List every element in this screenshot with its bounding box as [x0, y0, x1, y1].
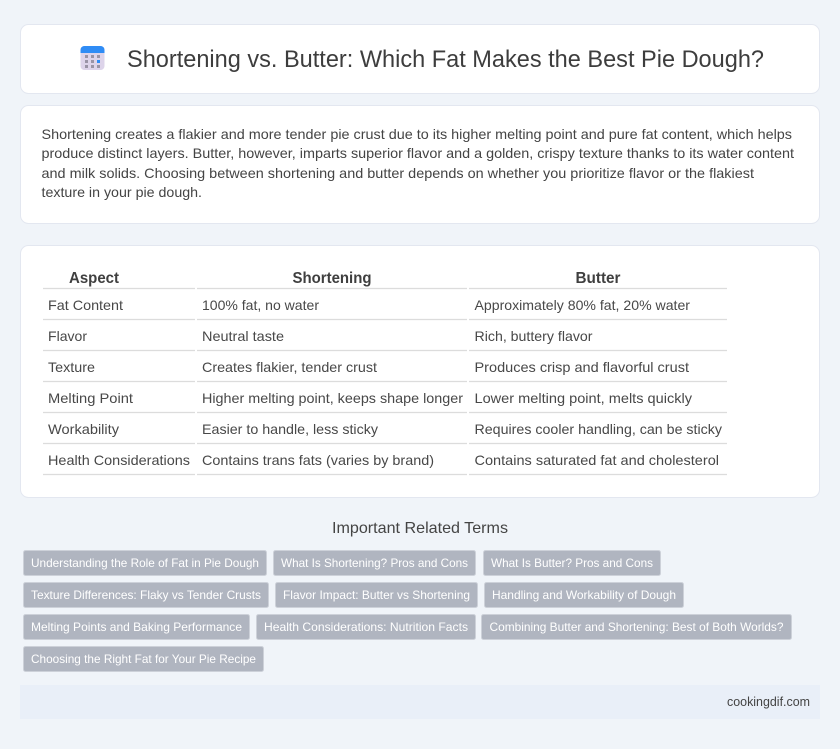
related term tags: Flavor Impact: Butter vs Shortening	[283, 588, 470, 602]
related term tags: What Is Shortening? Pros and Cons	[281, 556, 468, 570]
row: melting point: Higher melting point, keeps shape longer	[202, 390, 463, 406]
row: flavor: Flavor	[48, 328, 87, 344]
related term tags: Texture Differences: Flaky vs Tender Crusts	[31, 588, 261, 602]
row: flavor	[48, 328, 593, 344]
row: workability: Requires cooler handling, can be sticky	[474, 421, 722, 437]
row: fat content: Approximately 80% fat, 20% water	[474, 297, 690, 313]
footer: cookingdif.com	[727, 695, 810, 709]
icon: calendar	[80, 46, 104, 70]
related term tags: Handling and Workability of Dough	[492, 588, 676, 602]
row: health considerations: Contains saturated fat and cholesterol	[474, 452, 719, 468]
related term tags: Health Considerations: Nutrition Facts	[264, 620, 468, 634]
row: texture: Creates flakier, tender crust	[202, 359, 377, 375]
row: fat content: 100% fat, no water	[202, 297, 319, 313]
panel: comparison table	[20, 246, 820, 498]
row: melting point: Lower melting point, melts quickly	[474, 390, 692, 406]
table header	[69, 270, 620, 287]
panel: introduction text	[20, 106, 820, 224]
related term tags: Choosing the Right Fat for Your Pie Recipe	[31, 652, 256, 666]
related term tags	[24, 550, 792, 672]
row: fat content: Fat Content	[48, 297, 123, 313]
row: fat content	[48, 297, 690, 313]
row: workability: Easier to handle, less sticky	[202, 421, 378, 437]
row: health considerations: Health Considerations	[48, 452, 190, 468]
footer	[20, 685, 820, 719]
row: workability: Workability	[48, 421, 119, 437]
row: texture: Produces crisp and flavorful crust	[474, 359, 689, 375]
row: texture	[48, 359, 689, 375]
table header: Aspect	[69, 270, 120, 287]
table header: Shortening	[292, 270, 372, 287]
row: health considerations	[48, 452, 719, 468]
row: melting point: Melting Point	[48, 390, 133, 406]
row: texture: Texture	[48, 359, 95, 375]
row: workability	[48, 421, 722, 437]
row: flavor: Rich, buttery flavor	[474, 328, 593, 344]
row: health considerations: Contains trans fats (varies by brand)	[202, 452, 434, 468]
related term tags: Melting Points and Baking Performance	[31, 620, 242, 634]
panel: introduction text: Shortening creates a flakier and more tender pie crust due to its higher melting point and pure fat content, which helps	[42, 126, 792, 142]
panel: introduction text: texture in your pie dough.	[42, 184, 202, 200]
heading: important related terms: Important Related Terms	[332, 520, 508, 537]
related term tags: Understanding the Role of Fat in Pie Dough	[31, 556, 259, 570]
title: Shortening vs. Butter: Which Fat Makes the Best Pie Dough?	[127, 46, 764, 73]
row: flavor: Neutral taste	[202, 328, 284, 344]
header panel	[20, 24, 820, 94]
table header: Butter	[576, 270, 620, 287]
panel: introduction text: and milk solids. Choosing between shortening and butter depends on whether you prioritize flavor or the flakiest	[42, 165, 754, 181]
row: melting point	[48, 390, 692, 406]
related term tags: Combining Butter and Shortening: Best of Both Worlds?	[490, 620, 784, 634]
related term tags: What Is Butter? Pros and Cons	[491, 556, 653, 570]
panel: introduction text: produce distinct layers. Butter, however, imparts superior flavor and a golden, crispy texture thanks to its water content	[42, 145, 794, 161]
